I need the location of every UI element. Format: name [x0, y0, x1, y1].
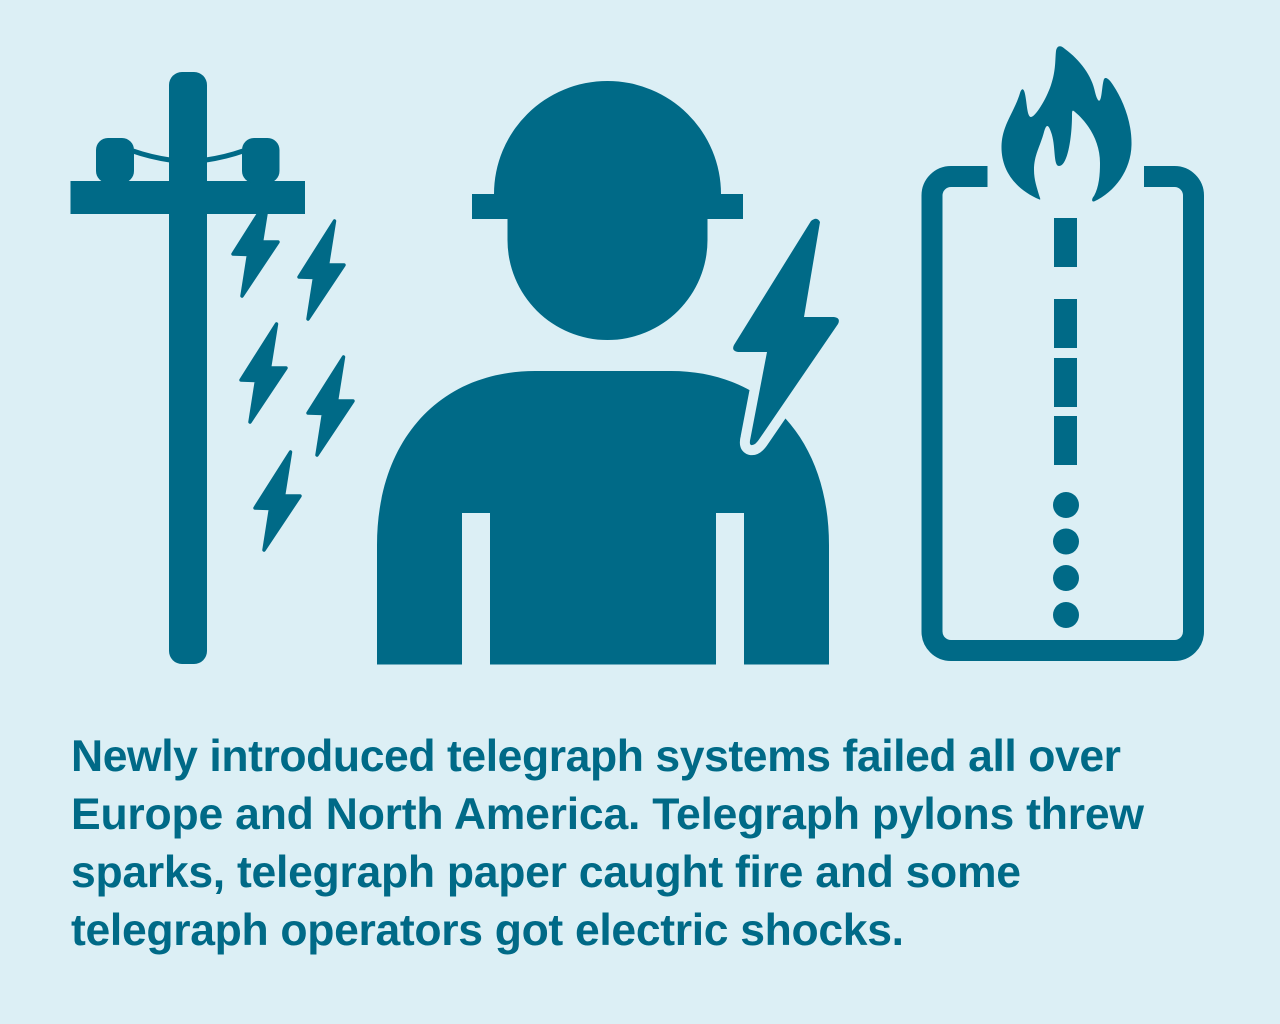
spark 2	[299, 221, 344, 319]
spark 3	[241, 324, 286, 422]
icon: telegraph pole with sparks	[70, 72, 353, 664]
wires	[133, 151, 243, 160]
pole post	[169, 72, 207, 664]
body	[377, 371, 829, 664]
dotted line	[1053, 492, 1079, 628]
lightning bolt	[733, 219, 839, 445]
spark 4	[308, 357, 353, 455]
paper outline	[932, 176, 1194, 650]
caption text	[71, 732, 1144, 955]
icon: burning telegraph paper	[932, 46, 1194, 651]
caption text: telegraph operators got electric shocks.	[71, 906, 904, 955]
caption text: sparks, telegraph paper caught fire and some	[71, 848, 1021, 897]
face	[508, 215, 708, 340]
caption text: Europe and North America. Telegraph pylons threw	[71, 790, 1144, 839]
right insulator	[242, 138, 280, 183]
left insulator	[96, 138, 134, 183]
dashed line	[1054, 218, 1077, 465]
caption text: Newly introduced telegraph systems failed all over	[71, 732, 1121, 781]
crossarm	[70, 181, 305, 214]
spark 1	[233, 198, 278, 296]
icon: operator receiving electric shock	[377, 81, 839, 664]
flame	[1001, 46, 1132, 202]
hard hat	[472, 81, 743, 219]
spark 5	[255, 452, 300, 550]
